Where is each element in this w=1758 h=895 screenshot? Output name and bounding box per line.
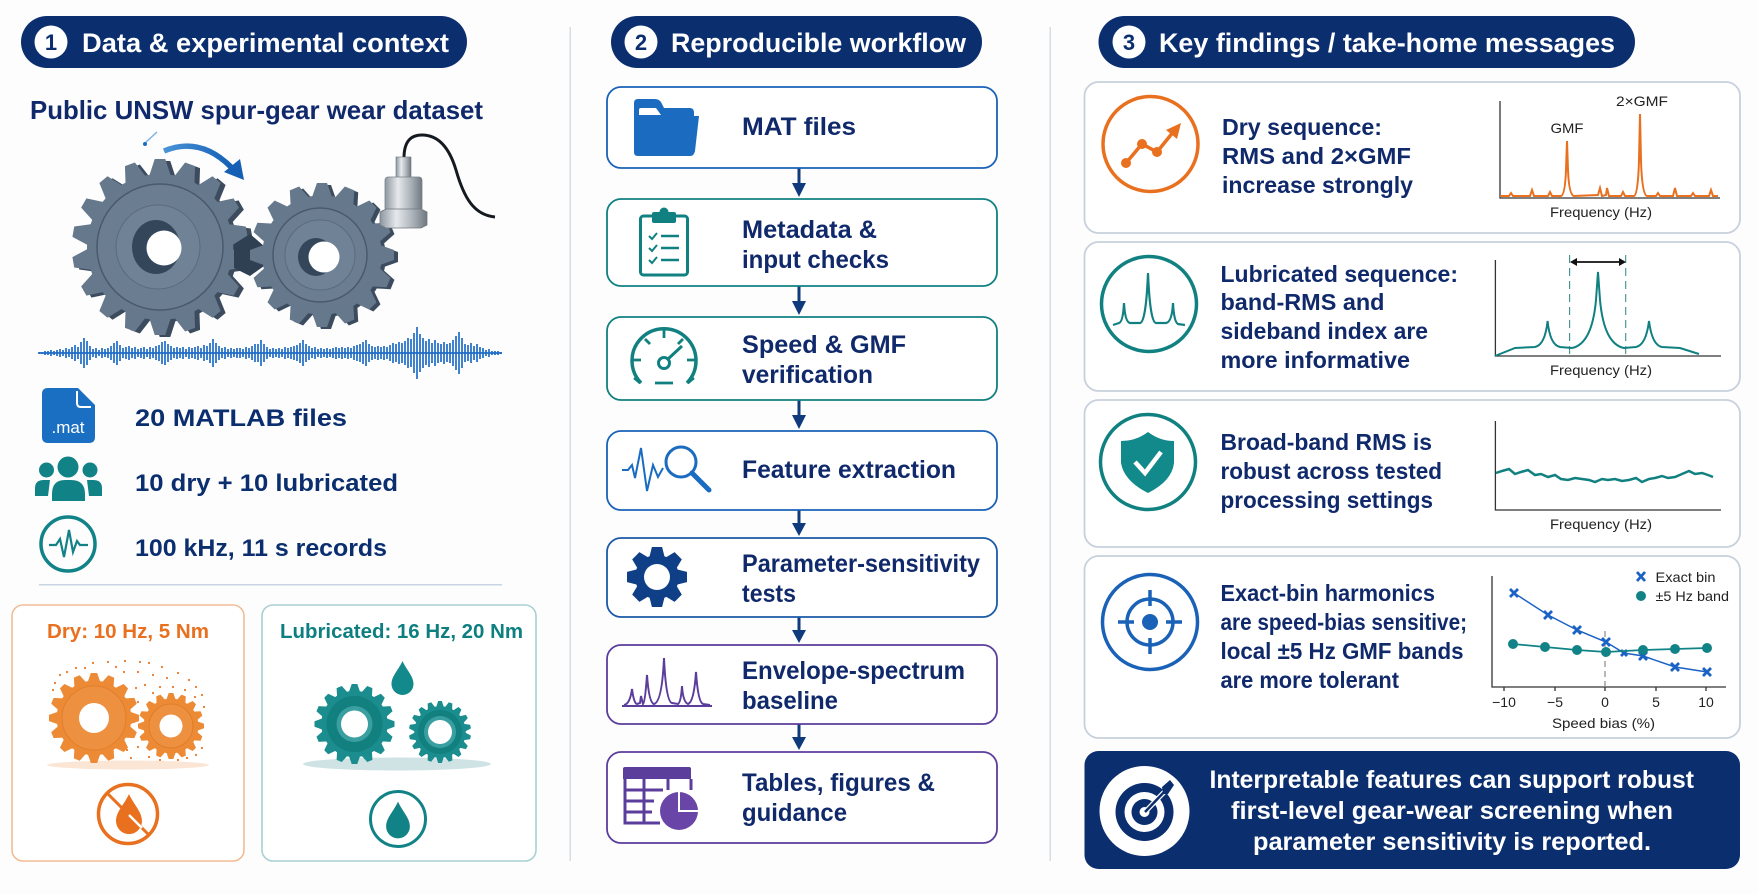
step: feature extraction bbox=[607, 431, 997, 510]
step: metadata and input checks: Metadata & bbox=[742, 216, 877, 244]
fact: 20 MATLAB files bbox=[42, 388, 347, 443]
panel: key findings bbox=[1084, 16, 1740, 869]
finding: dry sequence: increase strongly bbox=[1222, 172, 1413, 198]
step: speed and GMF verification: Speed & GMF bbox=[742, 331, 906, 359]
dataset title: Public UNSW spur-gear wear dataset bbox=[30, 95, 483, 125]
icon: folder bbox=[634, 99, 699, 156]
chart: lubricated spectrum: Frequency (Hz) bbox=[1550, 362, 1652, 378]
icon: cog bbox=[627, 547, 687, 607]
arrow: rotation direction bbox=[143, 132, 244, 180]
finding: exact-bin harmonics: local ±5 Hz GMF bands bbox=[1220, 638, 1464, 664]
step: metadata and input checks bbox=[607, 199, 997, 286]
fact: 100 kHz, 11 s records bbox=[41, 517, 387, 571]
series: exact bin bbox=[1510, 589, 1711, 676]
step: tables, figures and guidance: guidance bbox=[742, 799, 847, 827]
icon: sideband spectrum bbox=[1102, 256, 1196, 352]
illustration: teal gears with oil drop bbox=[303, 661, 491, 770]
panel: reproducible workflow bbox=[607, 16, 997, 843]
fact: 20 MATLAB files: 20 MATLAB files bbox=[135, 405, 347, 432]
finding: dry sequence: RMS and 2×GMF bbox=[1222, 143, 1411, 169]
chart: flat broad-band line bbox=[1495, 421, 1721, 532]
finding: lubricated sequence: sideband index are bbox=[1220, 318, 1428, 344]
axis tick labels: 10 bbox=[1698, 694, 1714, 710]
icon: lubrication drop bbox=[370, 792, 426, 846]
finding: broad-band RMS: Broad-band RMS is bbox=[1220, 429, 1432, 455]
finding: exact-bin harmonics bbox=[1084, 556, 1740, 738]
finding: exact-bin harmonics: are speed-bias sensitive; bbox=[1220, 609, 1467, 635]
finding: lubricated sequence: Lubricated sequence: bbox=[1220, 261, 1458, 287]
arrows between workflow steps bbox=[792, 168, 806, 750]
icon: signal in circle bbox=[41, 517, 95, 571]
icon: signal and magnifier bbox=[622, 447, 709, 491]
step: tables, figures and guidance bbox=[607, 752, 997, 843]
finding: broad-band RMS: robust across tested bbox=[1220, 458, 1442, 484]
fact: 100 kHz, 11 s records: 100 kHz, 11 s records bbox=[135, 535, 387, 562]
step: parameter sensitivity tests: Parameter-sensitivity bbox=[742, 550, 980, 578]
icon: accelerometer sensor with cable bbox=[380, 135, 495, 228]
axis tick labels bbox=[1492, 694, 1714, 710]
icon: envelope spectrum bbox=[622, 658, 712, 706]
step: envelope spectrum baseline: baseline bbox=[742, 687, 838, 715]
step: tables, figures and guidance: Tables, figures & bbox=[742, 769, 935, 797]
icon: no lubrication bbox=[98, 784, 158, 844]
heading: reproducible workflow bbox=[611, 16, 982, 68]
icon: target with arrow bbox=[1100, 766, 1190, 856]
chart: speed bias sensitivity bbox=[1492, 569, 1729, 731]
finding: lubricated sequence: more informative bbox=[1220, 347, 1410, 373]
legend: ±5 Hz band bbox=[1656, 588, 1729, 604]
step: MAT files: MAT files bbox=[742, 113, 856, 141]
fact: 10 dry + 10 lubricated bbox=[35, 456, 398, 501]
finding: broad-band RMS: processing settings bbox=[1220, 487, 1433, 513]
chart: dry spectrum: GMF bbox=[1550, 120, 1584, 136]
icon: group of people bbox=[35, 456, 102, 501]
lubricated condition label: Lubricated: 16 Hz, 20 Nm bbox=[280, 621, 523, 643]
heading: reproducible workflow: 2 bbox=[635, 30, 647, 55]
panel: lubricated condition bbox=[262, 605, 536, 861]
chart: vibration waveform bbox=[39, 327, 502, 379]
icon: crosshair target bbox=[1102, 574, 1198, 670]
heading: key findings: 3 bbox=[1123, 30, 1135, 55]
axis tick labels: −10 bbox=[1492, 694, 1516, 710]
finding: dry sequence: Dry sequence: bbox=[1222, 114, 1382, 140]
icon: table and pie chart bbox=[623, 767, 698, 830]
fact: 10 dry + 10 lubricated: 10 dry + 10 lubricated bbox=[135, 470, 398, 497]
illustration: orange gears with debris bbox=[47, 661, 209, 770]
heading: key findings bbox=[1098, 16, 1635, 68]
chart: dry spectrum: 2×GMF bbox=[1616, 93, 1668, 109]
icon: rising trend bbox=[1103, 96, 1198, 192]
step: speed and GMF verification bbox=[607, 317, 997, 400]
illustration: meshing steel gears bbox=[71, 159, 398, 337]
icon: .mat file bbox=[42, 388, 95, 443]
heading: data and experimental context bbox=[21, 16, 467, 68]
heading: key findings: Key findings / take-home messages bbox=[1159, 28, 1615, 58]
callout: conclusion: Interpretable features can support robust bbox=[1210, 766, 1695, 794]
axis tick labels: −5 bbox=[1547, 694, 1563, 710]
finding: broad-band RMS bbox=[1084, 400, 1740, 547]
step: feature extraction: Feature extraction bbox=[742, 456, 956, 484]
step: envelope spectrum baseline bbox=[607, 645, 997, 724]
step: parameter sensitivity tests: tests bbox=[742, 580, 796, 608]
chart: lubricated spectrum bbox=[1495, 255, 1721, 378]
icon: checklist clipboard bbox=[640, 208, 688, 275]
legend: Exact bin bbox=[1656, 569, 1716, 585]
axis tick labels: 0 bbox=[1601, 694, 1609, 710]
chart: dry spectrum: Frequency (Hz) bbox=[1550, 204, 1652, 220]
finding: exact-bin harmonics: Exact-bin harmonics bbox=[1220, 580, 1435, 606]
panel: data and experimental context bbox=[12, 16, 536, 861]
finding: dry sequence bbox=[1084, 82, 1740, 233]
legend bbox=[1636, 569, 1729, 604]
dry condition label: Dry: 10 Hz, 5 Nm bbox=[47, 621, 209, 643]
finding: lubricated sequence: band-RMS and bbox=[1220, 289, 1384, 315]
heading: reproducible workflow: Reproducible workflow bbox=[671, 28, 967, 58]
step: MAT files bbox=[607, 87, 997, 168]
chart: dry spectrum bbox=[1500, 93, 1720, 220]
finding: exact-bin harmonics: are more tolerant bbox=[1220, 667, 1399, 693]
series: 5 Hz band bbox=[1508, 639, 1712, 657]
step: envelope spectrum baseline: Envelope-spectrum bbox=[742, 657, 965, 685]
step: speed and GMF verification: verification bbox=[742, 361, 873, 389]
icon: shield with check bbox=[1100, 414, 1196, 510]
heading: data and experimental context: 1 bbox=[45, 30, 57, 55]
step: metadata and input checks: input checks bbox=[742, 246, 889, 274]
callout: conclusion: first-level gear-wear screening when bbox=[1231, 797, 1673, 825]
axis tick labels: 5 bbox=[1652, 694, 1660, 710]
finding: lubricated sequence bbox=[1084, 242, 1740, 391]
heading: data and experimental context: Data & experimental context bbox=[82, 28, 449, 58]
chart: flat broad-band line: Frequency (Hz) bbox=[1550, 516, 1652, 532]
panel: dry condition bbox=[12, 605, 244, 861]
icon: .mat file: .mat bbox=[51, 418, 85, 437]
chart: speed bias sensitivity: Speed bias (%) bbox=[1552, 715, 1655, 731]
step: parameter sensitivity tests bbox=[607, 538, 997, 617]
callout: conclusion: parameter sensitivity is reported. bbox=[1253, 828, 1651, 856]
callout: conclusion bbox=[1084, 751, 1740, 869]
icon: speed gauge bbox=[632, 329, 696, 383]
